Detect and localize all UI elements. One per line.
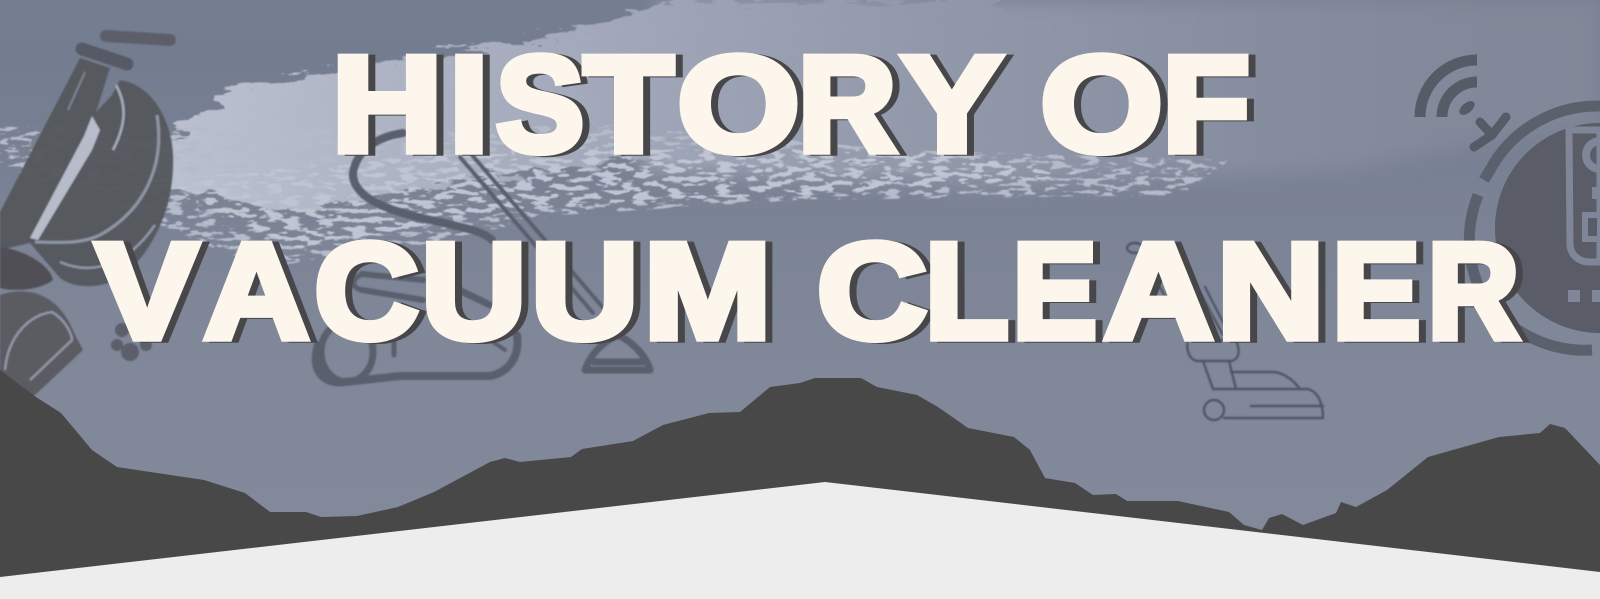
title line 2: C [314, 215, 418, 367]
title line 1: H [332, 28, 443, 180]
title line 2: U [531, 215, 638, 367]
title line 2: C [817, 215, 927, 367]
title line 1: I [450, 28, 488, 180]
icon: canister vacuum, centre outline [316, 133, 650, 382]
title line 2: N [1217, 215, 1324, 367]
title [96, 28, 1519, 367]
title line 2: E [1012, 215, 1097, 367]
title line 2: A [1104, 215, 1213, 367]
title line 1: Y [902, 28, 1000, 180]
title line 1: O [677, 28, 800, 180]
title line 1: S [496, 28, 584, 180]
title line 2: L [925, 215, 1009, 367]
title line 2: V [96, 215, 198, 367]
brush stroke texture [0, 0, 1600, 268]
mountain silhouette [0, 370, 1600, 599]
title line 2: M [644, 215, 771, 367]
title line 1: F [1162, 28, 1250, 180]
light ground chevron [0, 482, 1600, 599]
icon: robot vacuum with wifi signal [1420, 60, 1600, 350]
title line 1: T [584, 28, 673, 180]
title line 2: A [204, 215, 309, 367]
title line 2: R [1428, 215, 1519, 367]
title line 2: U [421, 215, 526, 367]
icon: upright vacuum outline [1127, 243, 1323, 420]
title line 2: E [1332, 215, 1420, 367]
title line 1: O [1040, 28, 1163, 180]
title line 1: R [798, 28, 896, 180]
icon: canister vacuum, solid silhouette left [0, 36, 173, 400]
